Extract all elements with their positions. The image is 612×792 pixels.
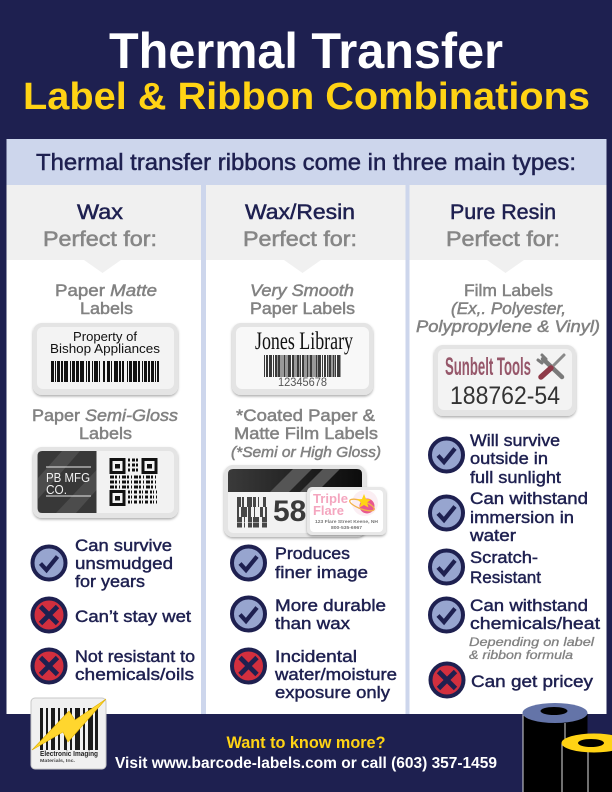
heading: pure resin: Perfect for: — [446, 228, 560, 251]
footer call to action — [115, 734, 497, 772]
text: scratch-resistant: Resistant — [470, 568, 541, 587]
icon: cross — [232, 650, 265, 682]
text: can't stay wet: Can’t stay wet — [75, 607, 191, 626]
title — [23, 23, 590, 118]
text: very smooth paper labels: Very Smooth — [250, 281, 354, 300]
label: bishop appliances barcode: Property of — [73, 330, 138, 344]
icon: check — [430, 438, 463, 472]
label: jones library barcode — [232, 323, 373, 395]
heading: wax/resin: Wax/Resin — [245, 201, 355, 224]
text: will survive: full sunlight — [470, 468, 561, 487]
text: paper matte labels: Labels — [80, 299, 133, 318]
text: coated paper and matte film labels: (*Semi or High Gloss) — [231, 444, 381, 461]
text: more durable: than wax — [275, 614, 351, 633]
panel: pure resin — [416, 201, 600, 696]
text: coated paper and matte film labels: Matte Film Labels — [234, 424, 378, 443]
text: paper semi-gloss labels: Labels — [79, 424, 132, 443]
text: very smooth paper labels — [250, 281, 355, 318]
icon: check — [232, 546, 265, 580]
label: triple flare: Triple — [313, 492, 348, 506]
panel: intro banner: Thermal transfer ribbons come in three main types: — [36, 149, 576, 175]
label: sunbelt tools — [434, 345, 576, 416]
heading: wax — [43, 201, 157, 251]
heading: wax/resin — [243, 201, 357, 251]
heading: pure resin — [446, 201, 560, 251]
text: film labels — [416, 281, 600, 336]
list: wax properties — [32, 536, 195, 684]
text: paper semi-gloss labels: Paper Semi-Gloss — [32, 406, 179, 425]
label: jones library barcode: Jones Library — [255, 328, 353, 355]
icon: lightning bolt — [32, 699, 106, 750]
label: black band 588 — [224, 465, 366, 537]
text: immersion: water — [469, 526, 516, 545]
icon: check — [430, 598, 463, 632]
icon: QR code — [110, 460, 157, 504]
list: wax/resin properties — [232, 544, 397, 702]
logo: electronic imaging materials: Materials, Inc. — [40, 758, 75, 763]
label: bishop appliances barcode: Bishop Appliances — [50, 342, 160, 356]
text: not resistant: Not resistant to — [75, 647, 195, 666]
text: film labels: Polypropylene & Vinyl) — [416, 317, 600, 336]
label: black band 588: 588 — [273, 495, 323, 528]
text: chemicals and heat: Can withstand — [470, 596, 588, 615]
footer call to action: Visit www.barcode-labels.com or call (603) 357-1459 — [115, 755, 497, 772]
icon: check — [430, 550, 463, 584]
label: triple flare: Flare — [313, 504, 344, 518]
text: can survive unsmudged: unsmudged — [75, 554, 173, 573]
panel: column backgrounds — [6, 185, 606, 714]
icon: check — [32, 546, 66, 580]
list: pure resin properties — [430, 431, 600, 696]
icon: cross — [430, 664, 464, 696]
text: coated paper and matte film labels — [231, 406, 381, 461]
text: produces finer image: finer image — [275, 563, 368, 582]
text: very smooth paper labels: Paper Labels — [250, 299, 355, 318]
text: can survive unsmudged: for years — [75, 572, 145, 591]
icon: planet — [348, 490, 378, 516]
text: produces finer image — [275, 544, 368, 582]
text: incidental exposure: water/moisture — [274, 665, 397, 684]
icon: wrench and screwdriver — [538, 355, 564, 377]
text: will survive: outside in — [470, 449, 548, 468]
heading: pure resin: Pure Resin — [450, 201, 556, 224]
text: chemicals and heat: chemicals/heat — [470, 614, 600, 633]
label: triple flare — [307, 487, 386, 535]
icon: check — [430, 496, 463, 530]
panel: wax/resin — [224, 201, 397, 702]
text: more durable: More durable — [275, 596, 386, 615]
text: produces finer image: Produces — [275, 544, 350, 563]
panel: intro banner — [6, 139, 606, 185]
text: chemicals and heat: & ribbon formula — [469, 650, 573, 662]
logo: electronic imaging materials — [31, 698, 106, 769]
text: immersion — [469, 489, 588, 545]
heading: wax: Wax — [77, 201, 124, 224]
heading: wax/resin: Perfect for: — [243, 228, 357, 251]
text: can survive unsmudged: Can survive — [75, 536, 172, 555]
text: coated paper and matte film labels: *Coated Paper & — [236, 406, 376, 425]
heading: wax: Perfect for: — [43, 228, 157, 251]
text: more durable — [275, 596, 386, 633]
text: film labels: Film Labels — [464, 281, 553, 300]
icon: blue ribbon roll — [522, 703, 588, 792]
text: can survive unsmudged — [75, 536, 173, 591]
text: not resistant — [75, 647, 195, 684]
label: triple flare: 800-535-6967 — [331, 525, 363, 530]
label: PB MFG QR code: PB MFG — [46, 471, 90, 485]
icon: cross — [32, 598, 66, 632]
text: paper matte labels: Paper Matte — [55, 281, 157, 300]
text: film labels: (Ex,. Polyester, — [451, 299, 566, 318]
text: can get pricey: Can get pricey — [471, 672, 594, 691]
label: bishop appliances barcode — [33, 323, 178, 395]
icon: yellow ribbon roll — [562, 734, 612, 792]
icon: cross — [32, 650, 66, 682]
label: PB MFG QR code: CO. — [46, 483, 67, 497]
footer call to action: Want to know more? — [226, 734, 386, 752]
text: immersion: immersion in — [470, 508, 574, 527]
text: chemicals and heat — [469, 596, 600, 662]
panel: wax — [32, 201, 195, 684]
label: triple flare: 123 Flare Street Keene, NH — [315, 519, 378, 524]
text: chemicals and heat: Depending on label — [469, 637, 595, 649]
label: sunbelt tools: Sunbelt Tools — [445, 353, 531, 381]
icon: check — [232, 598, 265, 630]
text: incidental exposure: exposure only — [275, 683, 391, 702]
text: not resistant: chemicals/oils — [75, 665, 194, 684]
title: Label & Ribbon Combinations — [23, 76, 590, 118]
label: sunbelt tools: 188762-54 — [450, 382, 560, 410]
text: paper semi-gloss labels — [32, 406, 179, 443]
label: PB MFG QR code — [33, 447, 178, 518]
text: incidental exposure: Incidental — [275, 647, 357, 666]
text: paper matte labels — [55, 281, 157, 318]
text: incidental exposure — [274, 647, 397, 702]
text: will survive: Will survive — [470, 431, 560, 450]
text: immersion: Can withstand — [470, 489, 588, 508]
title: Thermal Transfer — [109, 23, 503, 79]
text: will survive — [470, 431, 561, 487]
text: scratch-resistant: Scratch- — [470, 548, 538, 567]
logo: electronic imaging materials: Electronic Imaging — [40, 751, 98, 758]
text: scratch-resistant — [470, 548, 541, 587]
label: jones library barcode: 12345678 — [278, 377, 327, 389]
